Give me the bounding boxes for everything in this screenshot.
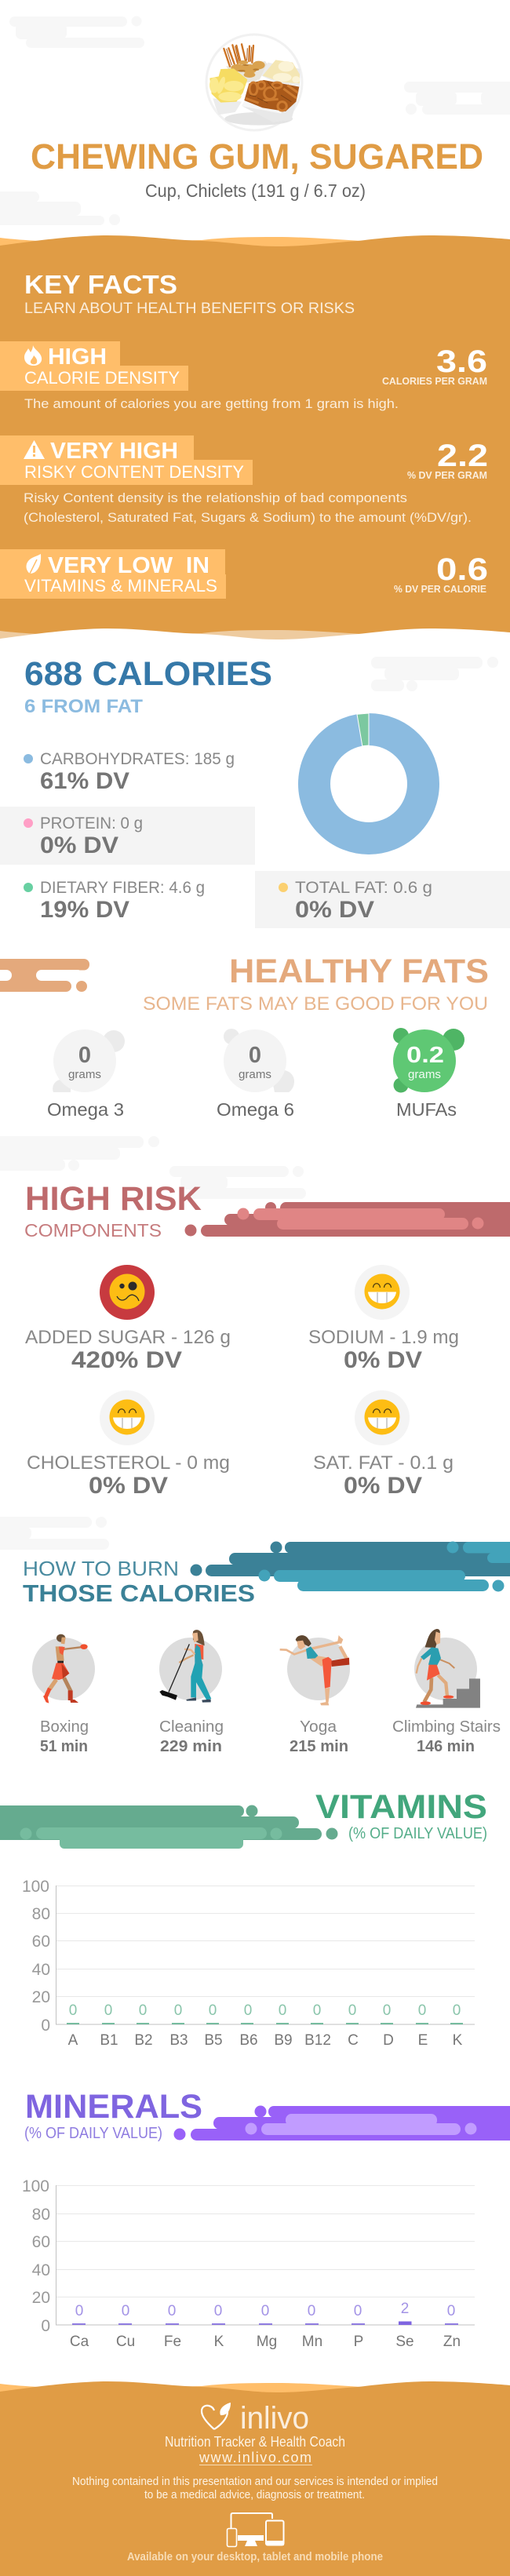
activity: yoga: Yoga (300, 1718, 337, 1736)
minerals subheading: (% OF DAILY VALUE) (24, 2125, 162, 2142)
saturated fat (313, 1390, 454, 1499)
vitamins bar chart: 100 (22, 1878, 49, 1896)
vitamins bar chart: 80 (32, 1905, 50, 1923)
vitamins bar chart: B1 (100, 2032, 118, 2049)
mufas: 0.2 (406, 1043, 444, 1068)
vitamins bar chart: 0 (279, 2002, 286, 2019)
vitamins bar chart: 0 (139, 2002, 147, 2019)
sodium: 0% DV (344, 1347, 422, 1373)
risky content density block (0, 435, 488, 525)
healthy fats heading: HEALTHY FATS (229, 953, 489, 990)
vitamins and minerals block: % DV PER CALORIE (394, 583, 486, 595)
cholesterol: 0% DV (89, 1473, 168, 1499)
vitamins bar chart: 0 (174, 2002, 182, 2019)
calories heading: 688 CALORIES (24, 655, 272, 693)
minerals bar chart: Fe (164, 2334, 181, 2350)
panel: footer (0, 2381, 510, 2576)
icon: leaf (27, 554, 41, 574)
vitamins heading: VITAMINS (315, 1788, 487, 1826)
vitamins bar chart: B9 (274, 2032, 293, 2049)
minerals bar chart: 0 (168, 2303, 176, 2319)
icon: warning triangle (24, 440, 45, 459)
omega 6: 0 (249, 1043, 261, 1068)
decorative orange cloud (0, 959, 89, 992)
minerals bar chart: 100 (22, 2177, 49, 2195)
serving size subtitle: Cup, Chiclets (191 g / 6.7 oz) (145, 180, 366, 201)
vitamins bar chart: C (348, 2032, 359, 2049)
icon: unhappy face (110, 1274, 144, 1309)
calories from fat: 6 FROM FAT (24, 696, 143, 717)
key facts subheading: LEARN ABOUT HEALTH BENEFITS OR RISKS (24, 301, 355, 317)
minerals bar chart: 80 (32, 2206, 50, 2224)
protein stat: 0% DV (40, 833, 118, 858)
donut chart (314, 713, 424, 838)
vitamins bar chart: 0 (104, 2002, 112, 2019)
carbohydrates stat (24, 750, 235, 794)
inlivo logo (202, 2401, 309, 2436)
vitamins and minerals block: VITAMINS & MINERALS (24, 576, 217, 596)
panel: calories (0, 655, 510, 928)
availability note: Available on your desktop, tablet and mobile phone (127, 2550, 383, 2563)
burn heading bold: THOSE CALORIES (23, 1579, 255, 1607)
risky content density block: VERY HIGH (50, 439, 178, 464)
carbohydrates stat: 61% DV (40, 768, 129, 794)
vitamins bar chart: 0 (69, 2002, 77, 2019)
key facts heading: KEY FACTS (24, 270, 177, 299)
sodium (308, 1265, 459, 1373)
minerals bar chart: 0 (122, 2303, 129, 2319)
components subheading: COMPONENTS (24, 1220, 162, 1241)
calorie density block: 3.6 (436, 344, 487, 379)
minerals bar chart (22, 2177, 475, 2350)
vitamins bar chart: B6 (239, 2032, 258, 2049)
omega 3 (47, 1029, 125, 1120)
title: CHEWING GUM, SUGARED (31, 137, 483, 177)
activity: climbing stairs: 146 min (417, 1738, 475, 1755)
omega 3: Omega 3 (47, 1099, 124, 1120)
omega 3: grams (68, 1068, 101, 1081)
dietary fiber stat (24, 879, 205, 923)
activity: yoga: 215 min (290, 1738, 348, 1755)
added sugar: 420% DV (71, 1347, 182, 1373)
saturated fat: 0% DV (344, 1473, 422, 1499)
panel: healthy fats (0, 953, 489, 1120)
vitamins bar chart: 60 (32, 1933, 50, 1951)
minerals bar chart: 0 (354, 2303, 362, 2319)
vitamins and minerals block (0, 549, 488, 599)
tagline: Nutrition Tracker & Health Coach (165, 2434, 345, 2450)
saturated fat: SAT. FAT - 0.1 g (313, 1452, 454, 1474)
activity: cleaning: Cleaning (159, 1718, 224, 1736)
panel: minerals (22, 2088, 510, 2350)
minerals bar chart: 0 (447, 2303, 455, 2319)
vitamins and minerals block: 0.6 (436, 552, 488, 587)
dietary fiber stat: 19% DV (40, 897, 129, 923)
vitamins bar chart: 0 (209, 2002, 217, 2019)
calorie density block: The amount of calories you are getting from 1 gram is high. (24, 396, 399, 411)
minerals bar chart: Ca (70, 2334, 89, 2350)
activity: climbing stairs (392, 1629, 501, 1755)
minerals bar chart: 0 (261, 2303, 269, 2319)
vitamins bar chart: B12 (304, 2032, 331, 2049)
activity: cleaning: 229 min (160, 1738, 222, 1755)
minerals bar chart: Cu (116, 2334, 135, 2350)
disclaimer: Nothing contained in this presentation and our services is intended or implied (72, 2476, 438, 2488)
mufas: grams (408, 1068, 441, 1081)
vitamins bar chart: K (453, 2032, 463, 2049)
decorative red cloud (185, 1202, 510, 1237)
calorie density block: CALORIES PER GRAM (382, 375, 487, 387)
icon: grinning face (364, 1400, 400, 1434)
sodium: SODIUM - 1.9 mg (308, 1327, 459, 1348)
risky content density block: RISKY CONTENT DENSITY (24, 462, 244, 482)
carbohydrates stat: CARBOHYDRATES: 185 g (40, 750, 235, 768)
icon: bowls of snacks (206, 35, 302, 130)
inlivo logo: inlivo (240, 2401, 309, 2436)
activity: climbing stairs: Climbing Stairs (392, 1718, 501, 1736)
added sugar (25, 1265, 231, 1373)
minerals bar chart: 40 (32, 2261, 50, 2279)
website link: www.inlivo.com (199, 2450, 311, 2465)
decorative purple cloud (174, 2106, 510, 2141)
vitamins bar chart: B2 (134, 2032, 153, 2049)
mufas (393, 1028, 464, 1120)
vitamins bar chart: A (68, 2032, 78, 2049)
vitamins bar chart: 40 (32, 1961, 50, 1979)
omega 3: 0 (78, 1043, 91, 1068)
vitamins subheading: (% OF DAILY VALUE) (348, 1825, 487, 1842)
activity: boxing: 51 min (40, 1738, 88, 1755)
total fat stat (255, 871, 510, 928)
cholesterol (27, 1390, 230, 1499)
vitamins bar chart: 0 (41, 2017, 50, 2035)
icon: person sweeping (159, 1630, 211, 1703)
panel: vitamins (0, 1788, 487, 2049)
icon: flame (24, 345, 42, 366)
high risk heading: HIGH RISK (25, 1180, 202, 1218)
added sugar: ADDED SUGAR - 126 g (25, 1327, 231, 1348)
panel: key facts (0, 235, 510, 655)
vitamins bar chart: 0 (244, 2002, 252, 2019)
burn heading light: HOW TO BURN (23, 1557, 179, 1580)
calorie density block: HIGH (48, 344, 107, 370)
icon: desktop, tablet and phone (228, 2513, 284, 2547)
calorie density block: CALORIE DENSITY (24, 368, 180, 388)
vitamins bar chart: 0 (348, 2002, 356, 2019)
minerals bar chart: 60 (32, 2233, 50, 2251)
minerals bar chart: P (354, 2334, 363, 2350)
total fat stat: TOTAL FAT: 0.6 g (295, 879, 432, 897)
decorative teal cloud (190, 1541, 510, 1591)
activity: cleaning (159, 1630, 224, 1755)
protein stat: PROTEIN: 0 g (40, 814, 143, 833)
vitamins bar chart: D (383, 2032, 394, 2049)
panel: high risk components (24, 1180, 510, 1499)
minerals bar chart: 0 (75, 2303, 83, 2319)
omega 6: Omega 6 (217, 1099, 294, 1120)
vitamins bar chart: B3 (169, 2032, 188, 2049)
omega 6: grams (239, 1068, 271, 1081)
icon: grinning face (110, 1400, 144, 1434)
healthy fats subheading: SOME FATS MAY BE GOOD FOR YOU (143, 993, 488, 1015)
activity: boxing (32, 1634, 95, 1755)
vitamins bar chart: E (418, 2032, 428, 2049)
disclaimer: to be a medical advice, diagnosis or treatment. (144, 2489, 365, 2501)
dietary fiber stat: DIETARY FIBER: 4.6 g (40, 879, 205, 897)
activity: yoga (280, 1635, 350, 1755)
icon: boxer (43, 1634, 88, 1703)
minerals bar chart: 0 (41, 2317, 50, 2335)
panel: how to burn calories (23, 1541, 510, 1755)
vitamins bar chart: 20 (32, 1988, 50, 2006)
minerals bar chart: Mg (257, 2334, 277, 2350)
vitamins bar chart: 0 (313, 2002, 321, 2019)
protein stat (0, 807, 255, 865)
omega 6 (217, 1029, 294, 1120)
risky content density block: (Cholesterol, Saturated Fat, Sugars & Sodium) to the amount (%DV/gr). (24, 510, 472, 525)
vitamins bar chart: B5 (204, 2032, 223, 2049)
minerals bar chart: Se (395, 2334, 414, 2350)
risky content density block: Risky Content density is the relationship of bad components (24, 490, 407, 505)
minerals bar chart: K (214, 2334, 224, 2350)
total fat stat: 0% DV (295, 897, 374, 923)
activity: boxing: Boxing (40, 1718, 89, 1736)
calorie density block (0, 341, 487, 411)
minerals bar chart: Zn (443, 2334, 461, 2350)
vitamins and minerals block: VERY LOW IN (48, 553, 209, 578)
minerals bar chart: 20 (32, 2289, 50, 2307)
risky content density block: 2.2 (437, 439, 488, 473)
vitamins bar chart: 0 (383, 2002, 391, 2019)
minerals bar chart: 0 (308, 2303, 315, 2319)
vitamins bar chart (22, 1878, 475, 2049)
cholesterol: CHOLESTEROL - 0 mg (27, 1452, 230, 1474)
minerals bar chart: 0 (214, 2303, 222, 2319)
minerals bar chart: 2 (401, 2301, 409, 2317)
risky content density block: % DV PER GRAM (407, 469, 487, 481)
decorative green cloud (0, 1805, 337, 1849)
mufas: MUFAs (396, 1099, 457, 1120)
vitamins bar chart: 0 (453, 2002, 461, 2019)
minerals heading: MINERALS (25, 2088, 202, 2126)
disclaimer (72, 2476, 438, 2501)
vitamins bar chart: 0 (418, 2002, 426, 2019)
icon: person climbing stairs (416, 1629, 480, 1708)
icon: grinning face (364, 1274, 400, 1309)
minerals bar chart: Mn (302, 2334, 322, 2350)
icon: yoga pose (280, 1635, 349, 1705)
